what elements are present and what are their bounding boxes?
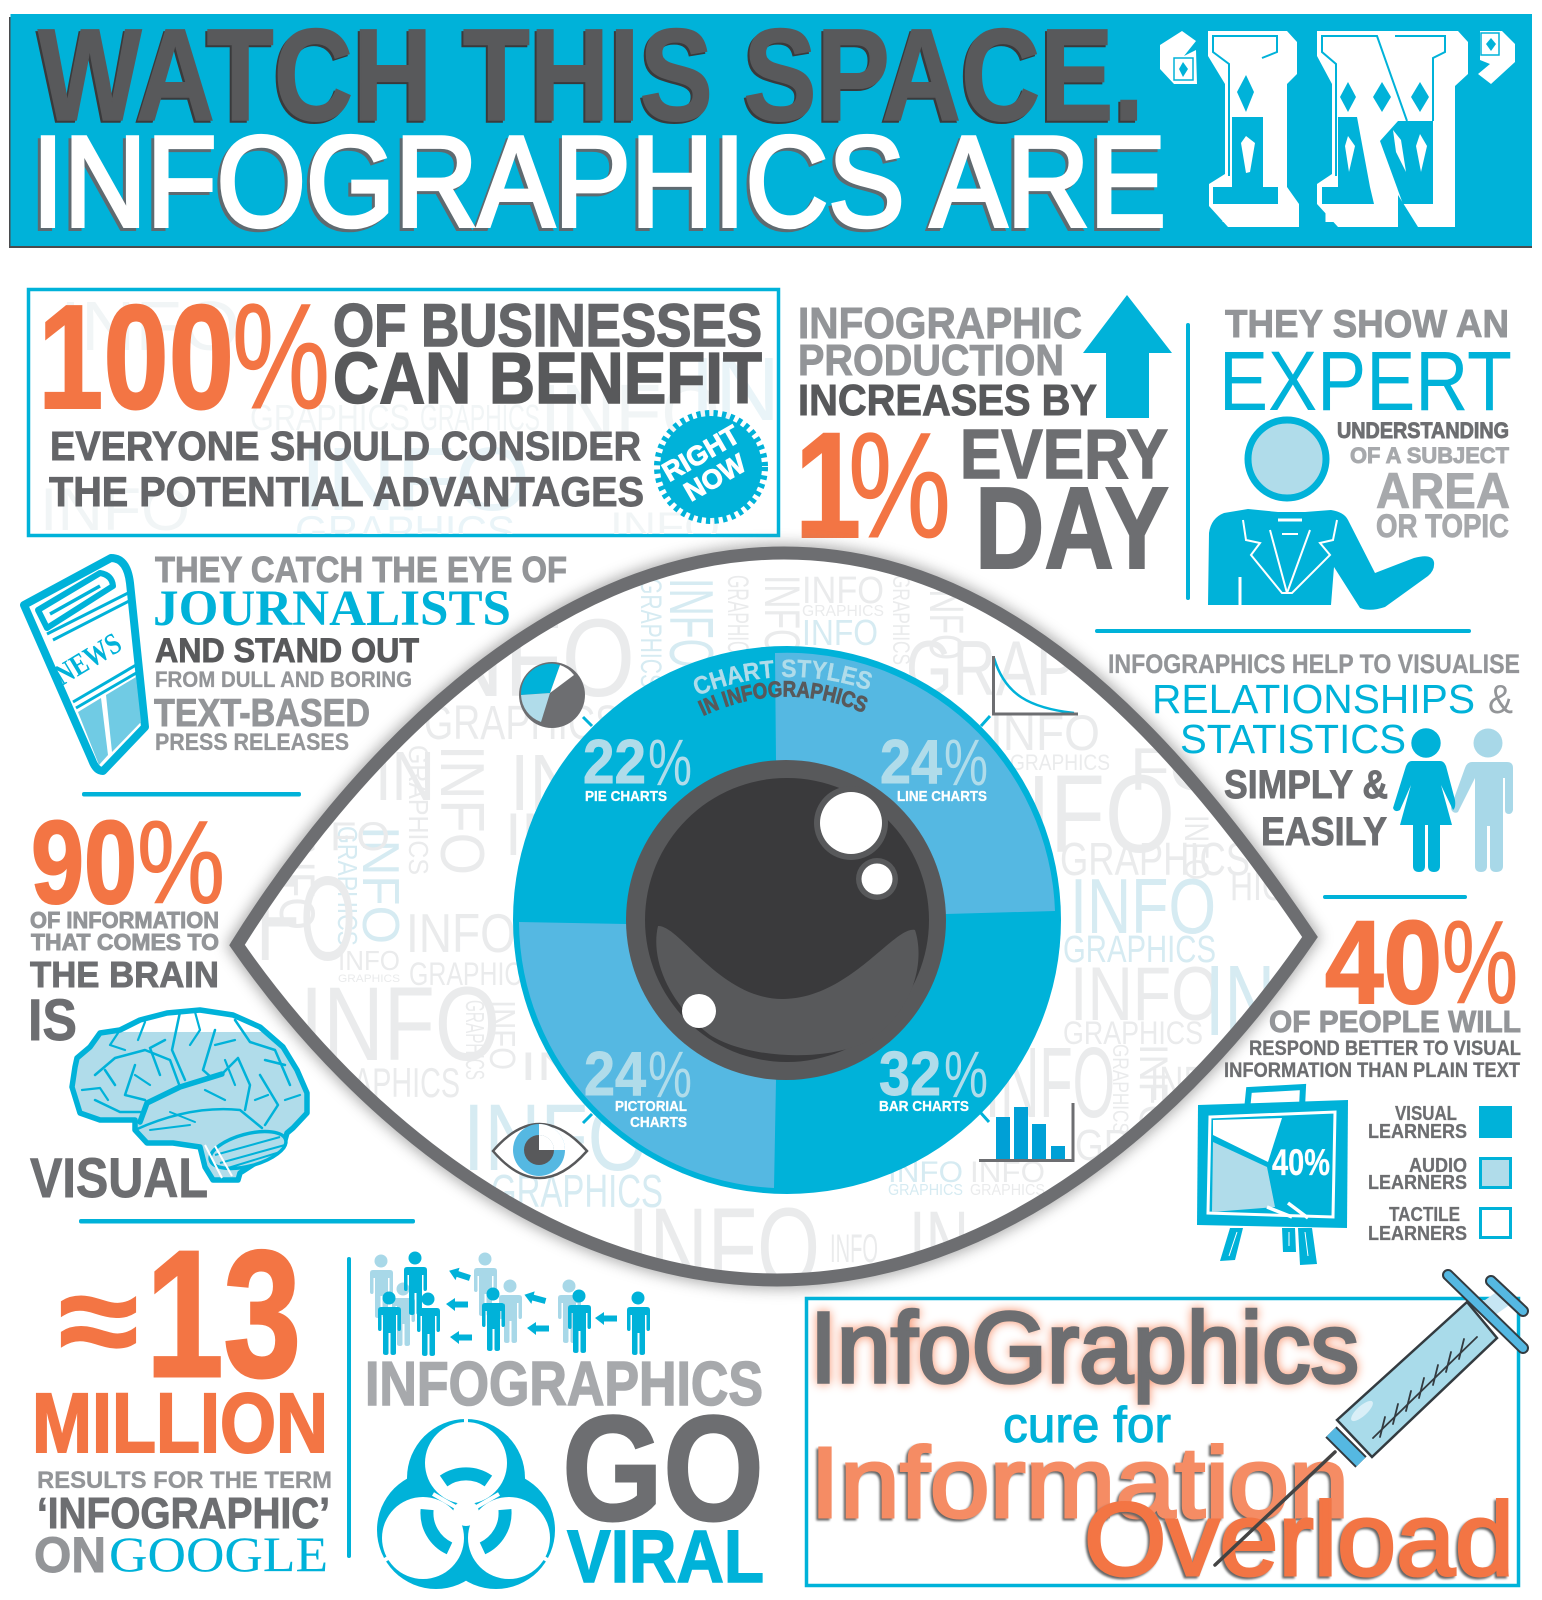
background word cloud: GRA (1075, 1121, 1156, 1170)
text: catch the eye of journalists: FROM DULL AND BORING (155, 667, 412, 692)
text: results for the term: RESULTS FOR THE TERM (37, 1467, 332, 1494)
statistic 1%: % (848, 401, 951, 569)
stat: line charts 24%: % (944, 725, 988, 799)
stat: pictorial charts 24%: % (648, 1037, 692, 1111)
background word cloud: INFO (627, 1185, 820, 1310)
stat: pie charts 22% (583, 725, 692, 805)
background word cloud: INFO (960, 753, 1175, 876)
icon: line chart (994, 656, 1078, 714)
iris chart: chart styles (513, 646, 1061, 1194)
background word cloud: IN (375, 737, 435, 815)
panel: expert (1208, 303, 1512, 610)
icon: syringe (1215, 1275, 1523, 1565)
background word cloud: GRAPHICS (409, 956, 539, 992)
background word cloud: INFO (830, 1227, 878, 1271)
background word cloud: IN (1205, 945, 1275, 1057)
statistic: approximately 13: 13 (146, 1214, 301, 1415)
stat: pie charts 22%: PIE CHARTS (585, 788, 667, 805)
background word cloud: GRAPHICS (1108, 1044, 1133, 1134)
legend item: tactile learners: LEARNERS (1368, 1223, 1467, 1245)
text: every day: EVERY (960, 415, 1168, 493)
headline: infographics are: INFOGRAPHICS ARE (32, 110, 1166, 254)
background word cloud: INFO (802, 612, 878, 653)
stat: line charts 24%: LINE CHARTS (897, 788, 987, 805)
text: of businesses can benefit: OF BUSINESSES (333, 292, 762, 359)
panel: infographics go viral (365, 1252, 764, 1598)
text: everyone should consider: THE POTENTIAL ADVANTAGES (49, 468, 644, 515)
text: catch the eye of journalists: AND STAND OUT (155, 632, 419, 670)
legend: learner types (1368, 1103, 1512, 1245)
background word texture: GRAPHICS (250, 397, 410, 438)
statistic: approximately 13: ≈ (59, 1247, 138, 1393)
icon: bar chart (979, 1103, 1073, 1160)
text: of information: THE BRAIN (30, 954, 219, 995)
badge: right now: NOW (679, 448, 752, 507)
text: of information: OF INFORMATION (30, 907, 219, 933)
text: of information (28, 907, 219, 1209)
legend item: audio learners: LEARNERS (1368, 1172, 1467, 1194)
text: million: MILLION (32, 1376, 328, 1470)
background word cloud: INFO (482, 1000, 523, 1070)
text: of information: VISUAL (30, 1146, 208, 1209)
background word texture: GRAPHICS (420, 397, 540, 438)
background word cloud: GRAP (906, 624, 1076, 712)
statistic 1%: 1 (795, 401, 861, 569)
eye shadow (237, 553, 1310, 1280)
chart title: CHART STYLES (694, 659, 872, 694)
icon: expert person (1208, 420, 1434, 610)
text: understanding of a subject: AREA (1376, 463, 1510, 519)
statistic 90%: 90 (31, 797, 137, 929)
stat: line charts 24%: 24 (880, 728, 942, 797)
background word cloud: GRAPHICS (491, 1165, 663, 1217)
background word texture: INFO (60, 287, 240, 365)
background word texture: INFO (40, 476, 190, 543)
background word cloud: INFO (269, 830, 325, 930)
statistic 40%: 40 (1325, 897, 1442, 1029)
legend item: visual learners: LEARNERS (1368, 1121, 1467, 1143)
stat: pictorial charts 24%: 24 (584, 1040, 646, 1109)
background word texture: GRAPHICS (295, 507, 515, 554)
chart title (694, 659, 872, 716)
background word cloud: FO (330, 815, 390, 859)
background word cloud: GRAPHICS (338, 973, 400, 985)
text: go: GO (562, 1384, 764, 1552)
background word cloud: GRAPHICS (802, 603, 884, 620)
background word cloud: INFO (656, 578, 725, 668)
text: infographic production: INFOGRAPHIC (798, 299, 1082, 348)
text: help to visualise: SIMPLY & (1224, 763, 1388, 807)
panel: information overload (806, 1292, 1518, 1598)
badge: right now: RIGHT (657, 419, 745, 487)
stat: pictorial charts 24%: CHARTS (630, 1114, 687, 1131)
heading: they show an expert: THEY SHOW AN (1225, 303, 1509, 346)
text: catch the eye of journalists: PRESS RELEASES (155, 729, 349, 756)
panel: journalists (24, 549, 567, 771)
background word cloud: INFO (1177, 815, 1215, 880)
icon: presentation board: 40% (1272, 1142, 1330, 1183)
header banner (9, 0, 1532, 283)
text: catch the eye of journalists: JOURNALISTS (153, 581, 511, 637)
panel: 13 million results (32, 1214, 332, 1583)
stat: bar charts 32%: BAR CHARTS (879, 1098, 969, 1115)
background word cloud: INFO (1070, 952, 1220, 1037)
eye white with word texture (237, 553, 1310, 1280)
icon: woman (1393, 728, 1455, 872)
text: catch the eye of journalists: THEY CATCH THE EYE OF (155, 549, 567, 590)
legend item: tactile learners (1368, 1204, 1510, 1245)
stat: pictorial charts 24% (584, 1037, 692, 1131)
icon: brain (69, 1007, 310, 1183)
background word cloud: HIC (1230, 865, 1285, 909)
statistic 90% (31, 797, 225, 929)
icon: presentation board (1197, 1087, 1348, 1265)
text: everyone should consider: EVERYONE SHOULD CONSIDER (50, 423, 641, 469)
text: infographics: InfoGraphics (810, 1292, 1359, 1404)
text: results for the term (34, 1467, 332, 1583)
background word cloud: GRAPHICS (1063, 929, 1216, 971)
text: infographic production: PRODUCTION (798, 336, 1064, 385)
background word cloud: FO (256, 852, 356, 986)
icon: newspaper (24, 558, 145, 771)
stat: bar charts 32%: % (944, 1037, 988, 1111)
background word cloud: INFO (463, 1085, 648, 1191)
text: infographic production: INCREASES BY (798, 376, 1097, 425)
text: every day: DAY (975, 463, 1169, 593)
text: of businesses can benefit: CAN BENEFIT (333, 339, 762, 419)
eye illustration (220, 535, 1326, 1298)
background word cloud: IN (520, 1045, 580, 1089)
background word cloud: IN (909, 1192, 969, 1298)
badge: right now (657, 414, 764, 520)
background word cloud (256, 570, 1285, 1310)
text: help to visualise (1108, 649, 1520, 854)
background word cloud: INFO (919, 580, 972, 660)
eye outline (237, 553, 1310, 1280)
legend item: visual learners (1368, 1103, 1512, 1143)
text: catch the eye of journalists: TEXT-BASED (154, 692, 370, 735)
text: understanding of a subject: OF A SUBJECT (1350, 443, 1510, 468)
background word texture (46, 302, 772, 534)
background word cloud: GRAPHICS (310, 1059, 460, 1106)
background word cloud: GRAPHICS (1063, 1015, 1203, 1051)
background word cloud: INFO (985, 1027, 1115, 1139)
text: infographic production (798, 299, 1097, 425)
legend item: visual learners: VISUAL (1395, 1103, 1457, 1125)
text: help to visualise: STATISTICS (1180, 716, 1406, 762)
text: understanding of a subject: UNDERSTANDING (1337, 418, 1509, 443)
icon: man (1451, 728, 1513, 872)
statistic 90%: % (137, 797, 225, 929)
text: results for the term: ON (34, 1527, 106, 1583)
background word cloud: INFO (300, 966, 500, 1083)
statistic 100%: % (232, 272, 330, 440)
panel: 100% of businesses (26, 288, 780, 538)
text: results for the term: GOOGLE (109, 1526, 328, 1582)
stat: bar charts 32%: 32 (879, 1040, 941, 1109)
text: everyone should consider (49, 423, 644, 515)
text: help to visualise: & (1488, 676, 1513, 722)
panel: relationships and statistics (1108, 649, 1520, 872)
statistic 1% (795, 401, 951, 569)
background word cloud: IN (505, 801, 565, 868)
statistic: approximately 13 (59, 1214, 301, 1415)
background word cloud: FO (1130, 736, 1220, 803)
background word cloud: INFO (1150, 1058, 1230, 1111)
text: of businesses can benefit (333, 292, 762, 419)
legend item: audio learners: AUDIO (1409, 1155, 1467, 1177)
text: results for the term: ‘INFOGRAPHIC’ (37, 1489, 330, 1538)
background word cloud: GRAPHICS (403, 745, 434, 875)
icon: small eye (493, 1124, 587, 1178)
background word cloud: GRAPHICS (970, 1182, 1045, 1199)
panel: 90% brain (30, 820, 310, 1198)
background word cloud: GRAPHICS (721, 575, 754, 665)
background word cloud: GRAPHICS (887, 575, 914, 665)
background word cloud: INFO (427, 745, 496, 875)
headline: watch this space: WATCH THIS SPACE. (38, 1, 1144, 148)
text: catch the eye of journalists (153, 549, 567, 756)
statistic 100%: 100 (38, 275, 234, 440)
text: understanding of a subject: OR TOPIC (1376, 508, 1509, 544)
background word cloud: GRAPHICS (460, 1000, 490, 1080)
text: every day (960, 415, 1169, 593)
icon: pie chart (519, 662, 585, 728)
text: information: Information (810, 1427, 1349, 1539)
statistic 40% (1325, 897, 1518, 1029)
decorative wood type word IN (1160, 0, 1515, 283)
background word texture: INFO (610, 505, 720, 549)
icon: up arrow (1083, 295, 1172, 418)
background word cloud: INFO (754, 575, 810, 655)
stat: bar charts 32% (879, 1037, 988, 1115)
panel: 40% respond better (1197, 897, 1521, 1265)
background word cloud: IN (510, 738, 580, 827)
text: infographics: INFOGRAPHICS (365, 1350, 763, 1419)
text: help to visualise: EASILY (1261, 810, 1387, 854)
text: overload: Overload (1084, 1482, 1514, 1598)
background word texture: INFO (540, 368, 720, 457)
text: help to visualise: RELATIONSHIPS (1152, 676, 1475, 722)
background word cloud: INFO (802, 570, 884, 612)
background word cloud: INFO (990, 705, 1100, 761)
icon: people spreading (370, 1252, 650, 1356)
background word texture: IN (690, 340, 780, 440)
background word cloud: INFO (351, 826, 409, 944)
legend item: audio learners (1368, 1155, 1510, 1194)
text: of people will (1224, 1004, 1521, 1082)
background word cloud: GRAPHICS (888, 1182, 963, 1199)
background word cloud: GRAPHICS (1060, 833, 1250, 885)
heading: they show an expert (1219, 303, 1512, 428)
background word cloud: GRAPHICS (332, 826, 363, 946)
background word cloud: INFO (410, 597, 635, 720)
background word cloud: GRAPHICS (424, 697, 620, 750)
icon: newspaper: NEWS (49, 627, 127, 692)
background word cloud: INFO (888, 1156, 963, 1189)
chart title: IN INFOGRAPHICS (698, 680, 868, 716)
text: understanding of a subject (1337, 418, 1510, 544)
stat: pie charts 22%: 22 (583, 728, 646, 797)
background word cloud: GRAPHICS (1010, 750, 1110, 775)
background word cloud: INFO (970, 1156, 1045, 1189)
text: of information: THAT COMES TO (31, 929, 219, 955)
background word cloud: INFO (406, 902, 516, 964)
background word cloud: GRAPHICS (634, 578, 667, 688)
stat: line charts 24% (880, 725, 988, 805)
background word texture: INFO (300, 430, 530, 530)
icon: biohazard (377, 1414, 555, 1589)
background word cloud: INFO (1131, 1044, 1175, 1134)
stat: pie charts 22%: % (648, 725, 692, 799)
legend item: tactile learners: TACTILE (1389, 1204, 1460, 1226)
text: of information: IS (28, 988, 77, 1053)
text: viral: VIRAL (567, 1515, 764, 1598)
stat: pictorial charts 24%: PICTORIAL (615, 1098, 687, 1115)
text: cure for: cure for (1003, 1397, 1171, 1453)
background word cloud: INFO (338, 945, 400, 976)
pupil (626, 760, 946, 1080)
background word cloud: INFO (1070, 862, 1216, 950)
panel: production increases (795, 295, 1172, 593)
text: of people will: OF PEOPLE WILL (1269, 1004, 1521, 1039)
